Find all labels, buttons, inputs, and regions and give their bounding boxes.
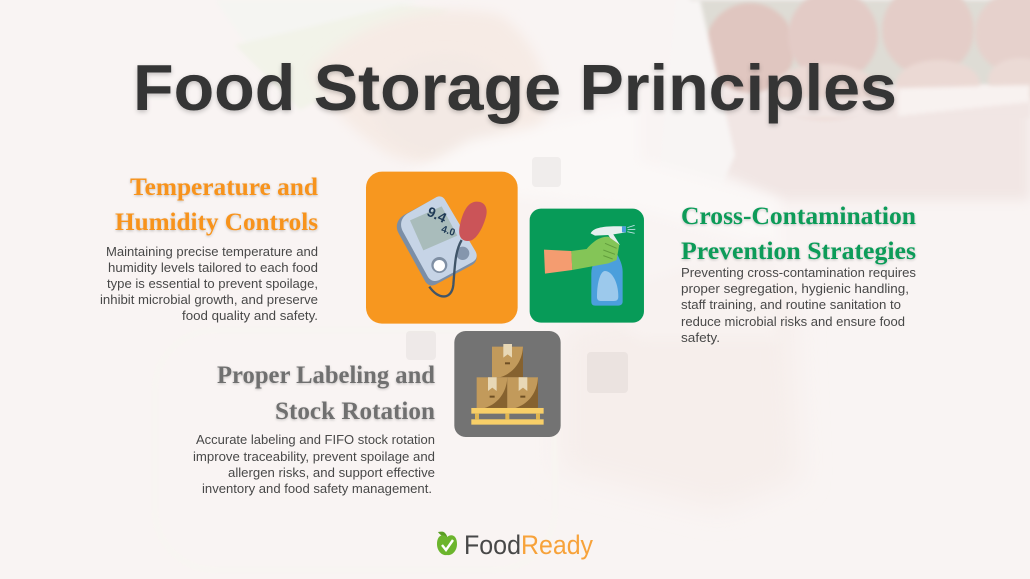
heading: labeling and rotation: Stock Rotation — [275, 398, 435, 425]
body text: temperature and humidity — [100, 244, 318, 323]
lower left box — [477, 377, 507, 408]
reading 9.4: 9.4 — [425, 203, 449, 226]
body text: labeling and rotation: improve traceability, prevent spoilage and — [193, 449, 435, 464]
glove — [571, 237, 619, 270]
panel: labeling and rotation text — [193, 362, 435, 496]
icon card: thermometer hygrometer — [366, 172, 518, 324]
body text: labeling and rotation: allergen risks, and support effective — [228, 465, 435, 480]
heading: cross-contamination: Cross-Contamination — [681, 203, 916, 230]
heading: cross-contamination: Prevention Strategies — [681, 238, 916, 265]
meter screen — [410, 206, 457, 250]
body text: temperature and humidity: type is essential to prevent spoilage, — [107, 276, 318, 291]
body text: temperature and humidity: Maintaining precise temperature and — [106, 244, 318, 259]
panel: temperature and humidity text — [100, 174, 318, 323]
body text: temperature and humidity: humidity levels tailored to each food — [108, 260, 318, 275]
body text: cross-contamination: proper segregation, hygienic handling, — [681, 281, 909, 296]
meter face — [401, 196, 477, 281]
body text: temperature and humidity: inhibit microbial growth, and preserve — [100, 292, 318, 307]
body text: cross-contamination: Preventing cross-contamination requires — [681, 265, 917, 280]
logo: FoodReady — [437, 530, 593, 560]
body text: labeling and rotation: Accurate labeling and FIFO stock rotation — [196, 432, 435, 447]
reading 4.0: 4.0 — [440, 224, 457, 239]
heading: temperature and humidity: Humidity Controls — [115, 209, 318, 236]
body text: cross-contamination: reduce microbial risks and ensure food — [681, 314, 905, 329]
body text: cross-contamination: safety. — [681, 330, 720, 345]
forearm — [544, 250, 572, 274]
heading: labeling and rotation: Proper Labeling and — [217, 362, 435, 389]
body text: cross-contamination: staff training, and routine sanitation to — [681, 297, 901, 312]
probe handle — [459, 202, 487, 241]
bottle — [591, 243, 623, 306]
body text: temperature and humidity: food quality and safety. — [182, 308, 318, 323]
trigger head — [591, 226, 626, 245]
pallet — [471, 408, 544, 414]
icon: apple with check — [437, 532, 457, 555]
heading: labeling and rotation — [217, 362, 435, 425]
body text: labeling and rotation: inventory and food safety management. — [202, 481, 432, 496]
icon card: spray bottle and gloved hand — [530, 209, 644, 323]
icon card: stacked boxes on pallet — [454, 331, 561, 437]
spray — [627, 225, 635, 233]
probe cable — [429, 240, 462, 296]
heading: cross-contamination — [681, 203, 916, 265]
logo wordmark: Ready: Ready — [521, 530, 593, 560]
meter back — [397, 197, 477, 286]
logo wordmark: Food: Food — [464, 530, 521, 560]
lower right box — [507, 377, 538, 408]
decorative faded square: top — [532, 157, 561, 187]
top box — [492, 347, 523, 377]
heading: temperature and humidity — [115, 174, 318, 236]
title: Food Storage Principles — [133, 51, 897, 124]
panel: cross-contamination text — [681, 203, 917, 345]
decorative faded square: left — [406, 331, 436, 360]
body text: cross-contamination — [681, 265, 917, 345]
body text: labeling and rotation — [193, 432, 435, 496]
decorative faded square: right — [587, 352, 628, 393]
heading: temperature and humidity: Temperature and — [130, 174, 318, 201]
